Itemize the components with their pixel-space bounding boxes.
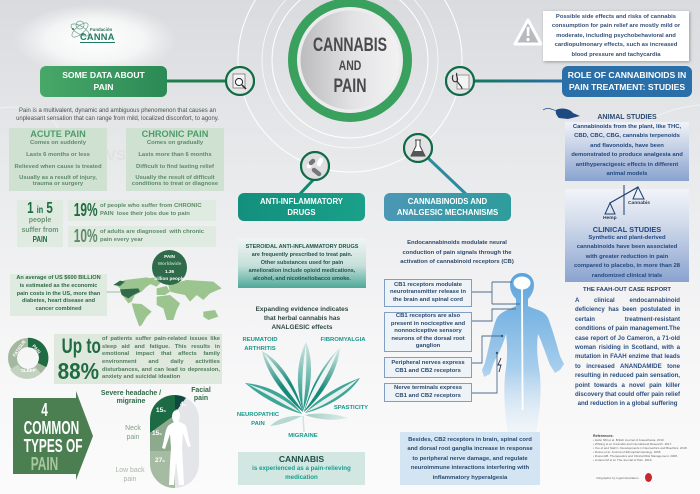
- references: References:: [593, 434, 614, 438]
- panel: chronic pain: Difficult to find lasting relief: [136, 164, 214, 170]
- panel: acute pain: [9, 128, 107, 191]
- heading: role of cannabinoids: [562, 66, 692, 97]
- box: CB1 brain and spinal cord: the brain and spinal cord: [393, 297, 463, 303]
- logo: Fundacion Canna: CANNA: [80, 32, 115, 42]
- box: CB1 brain and spinal cord: [384, 279, 472, 307]
- text: FAAH-out case report: certain treatment-resistant: [575, 316, 680, 323]
- panel: chronic pain: conditions to treat or diagnose: [132, 181, 218, 187]
- panel: animal studies: [565, 122, 689, 181]
- text: FAAH-out case report: and reduction in a global suffering: [578, 400, 677, 407]
- panel: clinical studies: randomized clinical trials: [592, 273, 662, 279]
- panel: clinical studies: Cannabis: [628, 201, 650, 206]
- text: expanding evidence: that herbal cannabis has: [264, 315, 340, 322]
- label: low back pain: pain: [123, 476, 137, 482]
- panel: CB2 receptors: Besides, CB2 receptors in brain, spinal cord: [408, 437, 532, 443]
- panel: cannabis pain-relieving: CANNABIS: [279, 454, 324, 464]
- text: FAAH-out case report: point towards a novel pain killer: [575, 382, 680, 389]
- heading: cannabinoids and analgesic mechanisms: CANNABINOIDS AND: [408, 197, 487, 206]
- label: fibromyalgia: FIBROMYALGIA: [321, 337, 365, 343]
- references: • Russo EB. Therapeutics and Clinical Risk Management. 2008.: [593, 454, 678, 458]
- panel: chronic pain: CHRONIC PAIN: [142, 129, 208, 139]
- stat: 10 percent: pain every year: [100, 237, 143, 243]
- label: facial pain: pain: [194, 395, 208, 402]
- panel: chronic pain: [126, 128, 224, 191]
- icon: fatigue pain sleep cycle: FATIGUE: [12, 339, 27, 358]
- panel: acute pain: Relieved when cause is treated: [14, 164, 102, 170]
- box: CB1 sensory neurons: ganglion: [416, 343, 440, 349]
- callout: pain worldwide: billion people: [154, 276, 185, 281]
- icon: fatigue pain sleep cycle: SLEEP: [21, 368, 36, 373]
- text: FAAH-out case report: conditions of pain management.The: [575, 325, 680, 332]
- panel: CB2 receptors: neuroimmune interactions interfering with: [411, 465, 529, 471]
- label: low back pain: Low back: [115, 467, 145, 474]
- intro text: Pain is a multivalent, dynamic and ambiguous phenomenon that causes an: [19, 108, 216, 114]
- chart: body pain distribution: 15%: [152, 430, 162, 437]
- heading: some data about pain: SOME DATA ABOUT: [62, 70, 145, 80]
- stat: 1 in 5 people: people: [29, 217, 51, 224]
- panel: steroidal drugs: alcohol, and nicotine/tobacco smoke.: [253, 276, 351, 282]
- label: neuropathic pain: PAIN: [251, 420, 265, 426]
- callout: pain worldwide: Worldwide: [158, 261, 181, 266]
- callout: economic cost: cancer combined: [35, 306, 82, 312]
- box: peripheral nerves: CB1 and CB2 receptors: [395, 368, 461, 374]
- references: • Hahn NM et al. British Journal of Anaesthesia. 2019.: [593, 438, 664, 442]
- arrow: 4 common types of pain: [13, 391, 93, 480]
- stat: 1 in 5 people: PAIN: [33, 235, 47, 244]
- icon: fatigue pain sleep cycle: [8, 338, 48, 379]
- panel: clinical studies: Hemp: [603, 216, 617, 221]
- callout: pain worldwide: [152, 250, 187, 285]
- heading: role of cannabinoids: PAIN TREATMENT: STUDIES: [569, 82, 685, 92]
- icon: warning triangle: [514, 18, 542, 46]
- panel: cannabis pain-relieving: is experienced as a pain-relieving: [252, 465, 351, 472]
- chart: body pain distribution: 27%: [155, 457, 165, 464]
- illustration: cannabis leaf: [245, 342, 360, 432]
- callout: pain worldwide: PAIN: [164, 254, 175, 259]
- central title disc: CANNABIS: [313, 34, 387, 56]
- callout: economic cost: [10, 274, 107, 316]
- text: FAAH-out case report: resulting in reduced pain sensation,: [575, 372, 680, 379]
- heading: anti-inflammatory drugs: DRUGS: [287, 208, 316, 217]
- vs label: VS: [106, 147, 126, 164]
- connectors: [167, 80, 229, 82]
- text: FAAH-out case report: [575, 287, 680, 407]
- text: endocannabinoids intro: [400, 240, 514, 265]
- logo: Fundacion Canna: Fundación: [90, 27, 112, 32]
- intro text: unpleasant sensation that can range from mild, localized disconfort, to agony.: [16, 116, 219, 122]
- callout: side effects: [543, 11, 689, 61]
- icon: flask: [403, 133, 433, 163]
- panel: steroidal drugs: amelioration include opioid medications,: [249, 268, 355, 274]
- panel: acute pain: trauma or surgery: [33, 181, 83, 187]
- panel: clinical studies: compared to placebo, in more than 28: [574, 263, 680, 269]
- callout: side effects: consumption for pain relief are mostly mild or: [552, 23, 680, 29]
- callout: economic cost: is estimated as the economic: [20, 283, 97, 289]
- panel: CB2 receptors: inflammatory hyperalgesia: [433, 475, 507, 481]
- heading: role of cannabinoids: ROLE OF CANNABINOIDS IN: [568, 70, 686, 80]
- panel: acute pain: ACUTE PAIN: [30, 129, 86, 139]
- box: peripheral nerves: [384, 357, 472, 378]
- stat: 19 percent: 19%: [74, 200, 98, 220]
- references: • Yeo-Ji and Niall C. Developments in Neuroethics and Bioethics. 2018.: [593, 446, 687, 450]
- panel: chronic pain: Usually the result of difficult: [135, 175, 215, 181]
- world map: [106, 277, 222, 326]
- illustration: human body: [472, 273, 564, 431]
- stat: 1 in 5 people: 1 in 5: [27, 200, 53, 217]
- heading: cannabinoids and analgesic mechanisms: [384, 193, 511, 221]
- arrow: 4 common types of pain: TYPES OF: [24, 436, 82, 456]
- central title disc: PAIN: [334, 76, 366, 97]
- panel: CB2 receptors: [400, 432, 540, 485]
- text: expanding evidence: [256, 306, 348, 331]
- panel: animal studies: demonstrated to produce analgesia and: [571, 152, 683, 158]
- chart: body pain distribution: 15%: [156, 407, 166, 414]
- chart: body pain distribution: [150, 395, 199, 488]
- panel: clinical studies: [565, 189, 689, 282]
- callout: pain worldwide: 1.36: [165, 269, 174, 274]
- text: endocannabinoids intro: Endocannabinoids modulate neural: [407, 240, 507, 246]
- text: expanding evidence: ANALGESIC effects: [271, 324, 333, 331]
- label: neuropathic pain: [237, 412, 279, 426]
- icon: mouse: [542, 108, 580, 119]
- callout: side effects: moderate, including psychobehavioral and: [556, 33, 676, 39]
- arrow: 4 common types of pain: 4: [41, 400, 48, 420]
- box: nerve terminals: CB1 and CB2 receptors: [395, 392, 461, 398]
- text: endocannabinoids intro: activation of cannabinoid receptors (CB): [400, 259, 514, 265]
- chart: body pain distribution: 4%: [180, 401, 187, 408]
- stat: up to 88 percent: Up to: [62, 335, 101, 358]
- box: nerve terminals: [384, 383, 472, 402]
- panel: CB2 receptors: to peripheral nerve damage, and regulate: [412, 456, 528, 462]
- label: neuropathic pain: NEUROPATHIC: [237, 412, 279, 418]
- label: facial pain: [191, 386, 211, 402]
- panel: clinical studies: Synthetic and plant-derived: [588, 235, 666, 241]
- logo: Fundacion Canna: [70, 20, 115, 43]
- callout: side effects: cardiopulmonary effects, such as increased: [555, 42, 677, 48]
- label: severe headache: migraine: [117, 398, 145, 405]
- label: migraine: MIGRAINE: [288, 433, 318, 439]
- text: FAAH-out case report: case report of Jo Cameron, a 71-old: [575, 335, 680, 342]
- panel: acute pain: Usually as a result of injury,: [19, 175, 97, 181]
- stat: up to 88 percent: 88%: [58, 358, 99, 384]
- stat: 19 percent: PAIN lose their jobs due to pain: [100, 211, 190, 217]
- label: low back pain: [115, 466, 145, 482]
- stat: 1 in 5 people: [17, 200, 63, 247]
- callout: economic cost: pain costs in the US, more than: [17, 291, 100, 297]
- intro text: [16, 108, 219, 122]
- stat: 10 percent: of adults are diagnosed with chronic: [100, 229, 204, 235]
- text: FAAH-out case report: THE FAAH-OUT CASE REPORT: [583, 287, 671, 293]
- central title disc: AND: [339, 57, 361, 73]
- panel: animal studies: Cannabinoids from the plant, like THC,: [573, 124, 681, 130]
- box: CB1 sensory neurons: present in nociceptive and: [391, 321, 465, 327]
- references: • Russo et al. Journal of Ethnopharmacology. 2006.: [593, 450, 661, 454]
- stat: 10 percent: 10%: [74, 226, 98, 246]
- panel: steroidal drugs: STEROIDAL ANTI-INFLAMMATORY DRUGS: [246, 244, 358, 250]
- box: peripheral nerves: Peripheral nerves express: [391, 360, 465, 366]
- label: neck pain: [125, 424, 141, 440]
- label: neck pain: pain: [126, 434, 140, 440]
- panel: steroidal drugs: [238, 238, 366, 288]
- label: reumatoid arthritis: REUMATOID: [242, 337, 278, 343]
- icon: stethoscope: [445, 66, 475, 96]
- panel: clinical studies: CLINICAL STUDIES: [593, 224, 661, 234]
- label: reumatoid arthritis: [242, 337, 278, 352]
- callout: economic cost: An average of US $600 BILLION: [16, 275, 101, 281]
- text: FAAH-out case report: woman risiding in Scotland, with a: [575, 344, 680, 351]
- panel: steroidal drugs: Other substances used for pain: [261, 260, 343, 266]
- text: expanding evidence: Expanding evidence indicates: [256, 306, 348, 313]
- text: FAAH-out case report: A clinical endocannabinoid: [575, 297, 680, 304]
- box: nerve terminals: Nerve terminals express: [394, 385, 462, 391]
- text: FAAH-out case report: mutation in FAAH enzime that leads: [575, 353, 680, 360]
- box: CB1 sensory neurons: nonnociceptive sensory: [394, 328, 462, 334]
- text: endocannabinoids intro: conduction of pain signals through the: [402, 250, 511, 256]
- box: CB1 brain and spinal cord: CB1 receptors modulate: [394, 282, 462, 288]
- panel: animal studies: and flavonoids, have been: [590, 143, 664, 149]
- icon: pills: [300, 151, 330, 181]
- references: • Linares IM et al. The Journal of Pain. 2019.: [593, 458, 652, 462]
- stat: up to 88 percent: [54, 334, 222, 384]
- callout: economic cost: diabetes, heart disease and: [22, 298, 95, 304]
- callout: side effects: Possible side effects and risks of cannabis: [556, 14, 676, 20]
- heading: cannabinoids and analgesic mechanisms: ANALGESIC MECHANISMS: [397, 208, 498, 217]
- panel: cannabis pain-relieving: medication: [285, 474, 318, 481]
- panel: clinical studies: cannabinoids have been associated: [577, 244, 677, 250]
- credit: Infographic by Ingeli illustration: [596, 476, 638, 480]
- label: facial pain: Facial: [191, 387, 211, 394]
- stat: 19 percent: [68, 200, 216, 221]
- box: CB1 sensory neurons: [384, 312, 472, 352]
- label: neck pain: Neck: [125, 425, 141, 432]
- box: CB1 sensory neurons: CB1 receptors are also: [396, 313, 460, 319]
- label: reumatoid arthritis: ARTHRITIS: [244, 346, 276, 352]
- icon: magnifier on report: [225, 66, 255, 96]
- panel: CB2 receptors: and dorsal root ganglia increase in response: [407, 446, 533, 452]
- label: spasticity: SPASTICITY: [334, 405, 368, 411]
- callout: side effects: blood pressure and tachycardia: [571, 52, 661, 58]
- references: • Whiting et al. Cannabis and Cannabinoid Research. 2017.: [593, 442, 672, 446]
- panel: steroidal drugs: are frequently prescribed to treat pain.: [252, 252, 352, 258]
- credit: [596, 473, 652, 482]
- heading: animal studies: ANIMAL STUDIES: [597, 114, 657, 121]
- stat: up to 88 percent: of patients suffer pain-related issues like sleep aid and fatigue. This results in emotional impact that affects family environment and daily activities disturbances, and can lead to depression, anxiety and suicidal ideation: [102, 336, 220, 380]
- text: FAAH-out case report: to increased ANANDAMIDE tone: [575, 363, 680, 370]
- icon: fatigue pain sleep cycle: PAIN: [31, 343, 42, 355]
- stat: 10 percent: [68, 226, 216, 247]
- heading: some data about pain: [40, 66, 167, 97]
- panel: chronic pain: Comes on gradually: [147, 140, 203, 146]
- box: CB1 brain and spinal cord: neurotransmitter release in: [390, 289, 466, 295]
- panel: acute pain: Comes on suddenly: [30, 140, 86, 146]
- panel: clinical studies: with greater reduction in pain: [586, 254, 668, 260]
- arrow: 4 common types of pain: PAIN: [31, 454, 58, 474]
- arrow: 4 common types of pain: COMMON: [24, 418, 79, 438]
- box: CB1 sensory neurons: neurons of the dorsal root: [391, 336, 465, 342]
- panel: animal studies: animal models: [607, 171, 647, 177]
- panel: animal studies: antihyperacigesic effects in different: [576, 162, 678, 168]
- panel: cannabis pain-relieving: [238, 452, 365, 485]
- label: severe headache: Severe headache /: [101, 390, 161, 397]
- central title disc: [288, 0, 412, 122]
- references: [593, 434, 688, 462]
- text: FAAH-out case report: discovery that could offer pain relief: [575, 391, 680, 398]
- panel: chronic pain: Lasts more than 6 months: [138, 152, 212, 158]
- heading: some data about pain: PAIN: [94, 82, 113, 92]
- panel: animal studies: CBD, CBC, CBG, cannabis terpenoids: [574, 133, 680, 139]
- panel: acute pain: Lasts 6 months or less: [26, 152, 90, 158]
- stat: 19 percent: of people who suffer from CHRONIC: [100, 203, 201, 209]
- text: FAAH-out case report: deficiency has been postulated in: [575, 306, 680, 313]
- label: severe headache: [101, 390, 161, 405]
- heading: anti-inflammatory drugs: ANTI-INFLAMMATORY: [260, 197, 343, 206]
- stat: 1 in 5 people: suffer from: [22, 227, 58, 234]
- heading: anti-inflammatory drugs: [238, 193, 365, 221]
